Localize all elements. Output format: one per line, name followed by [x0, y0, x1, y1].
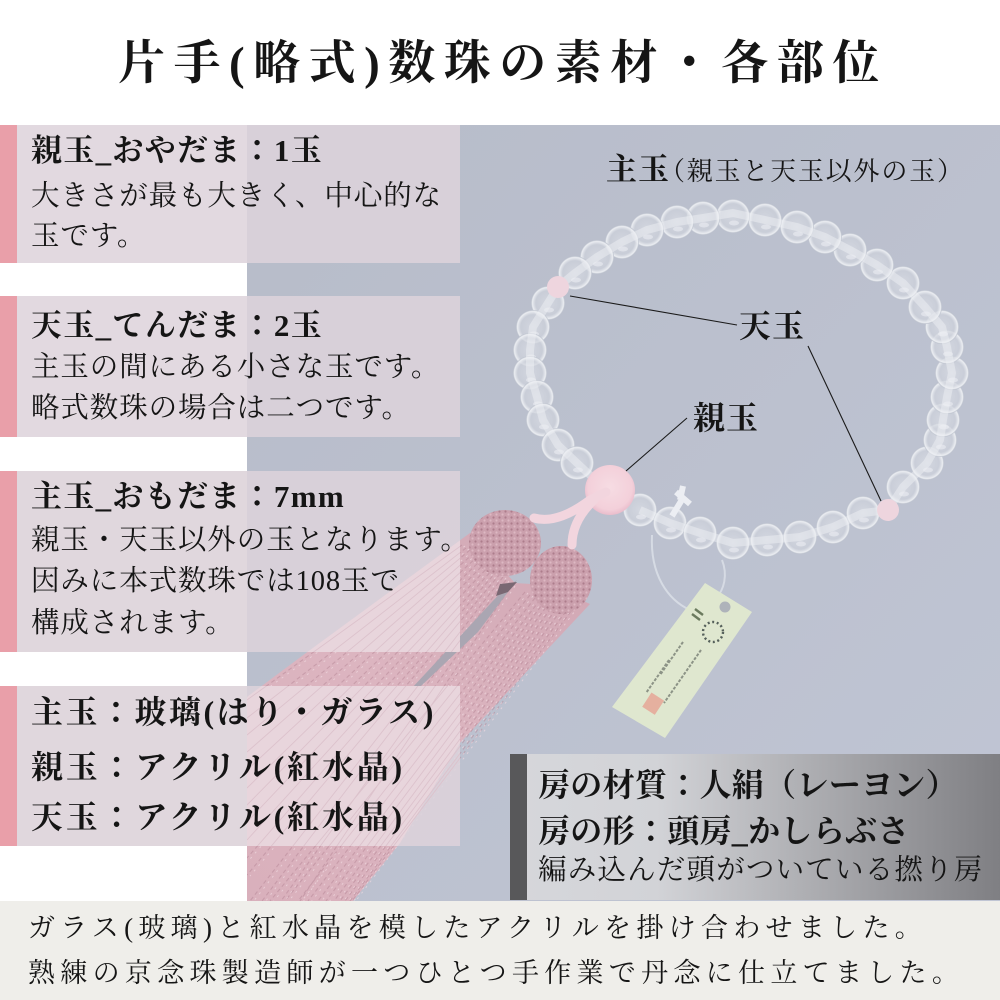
- panel: oya-dama: 玉です。: [31, 221, 146, 252]
- ten-dama pink beads: [547, 276, 899, 521]
- leader lines: [570, 296, 881, 501]
- panel: ten-dama: [0, 296, 460, 437]
- tassel heads: [469, 510, 592, 614]
- plastic tag loop: [652, 486, 725, 610]
- panel: omo-dama: [0, 471, 460, 652]
- panel: ten-dama: 主玉の間にある小さな玉です。: [31, 352, 440, 383]
- title: 片手(略式)数珠の素材・各部位: [118, 38, 888, 90]
- bead string over beads: [530, 213, 952, 543]
- footer text band: 熟練の京念珠製造師が一つひとつ手作業で丹念に仕立てました。: [28, 958, 964, 988]
- panel: tassel: 編み込んだ頭がついている撚り房: [538, 855, 984, 886]
- panel: omo-dama: 因みに本式数珠では108玉で: [31, 566, 400, 597]
- label: oya-dama: 親玉: [693, 400, 759, 436]
- panel: materials: 天玉：アクリル(紅水晶): [31, 799, 405, 835]
- panel: oya-dama: [0, 125, 460, 263]
- oya-dama pink bead: [585, 465, 635, 515]
- panel: materials: 親玉：アクリル(紅水晶): [31, 749, 405, 785]
- braided cords: [534, 492, 606, 545]
- panel: omo-dama: 親玉・天玉以外の玉となります。: [31, 525, 470, 556]
- panel: ten-dama: 天玉_てんだま：2玉: [31, 308, 323, 343]
- panel: omo-dama: 構成されます。: [31, 608, 235, 639]
- panel: oya-dama: 大きさが最も大きく、中心的な: [31, 181, 442, 212]
- panel: tassel: [510, 754, 1000, 900]
- footer text band: [0, 901, 1000, 1000]
- label: ten-dama: 天玉: [739, 308, 805, 344]
- panel: materials: 主玉：玻璃(はり・ガラス): [31, 694, 436, 730]
- product photo: [247, 125, 1000, 901]
- main beads: [513, 199, 969, 560]
- panel: ten-dama: 略式数珠の場合は二つです。: [31, 393, 411, 424]
- label: main bead: 主玉（親玉と天玉以外の玉）: [606, 152, 965, 187]
- panel: tassel: 房の形：頭房_かしらぶさ: [538, 813, 910, 849]
- panel: tassel: 房の材質：人絹（レーヨン）: [538, 767, 958, 803]
- panel: materials: [0, 686, 460, 846]
- panel: oya-dama: 親玉_おやだま：1玉: [31, 133, 323, 168]
- panel: omo-dama: 主玉_おもだま：7mm: [31, 479, 345, 514]
- footer text band: ガラス(玻璃)と紅水晶を模したアクリルを掛け合わせました。: [28, 913, 927, 943]
- product tag: [612, 583, 752, 738]
- tassels: [247, 533, 590, 902]
